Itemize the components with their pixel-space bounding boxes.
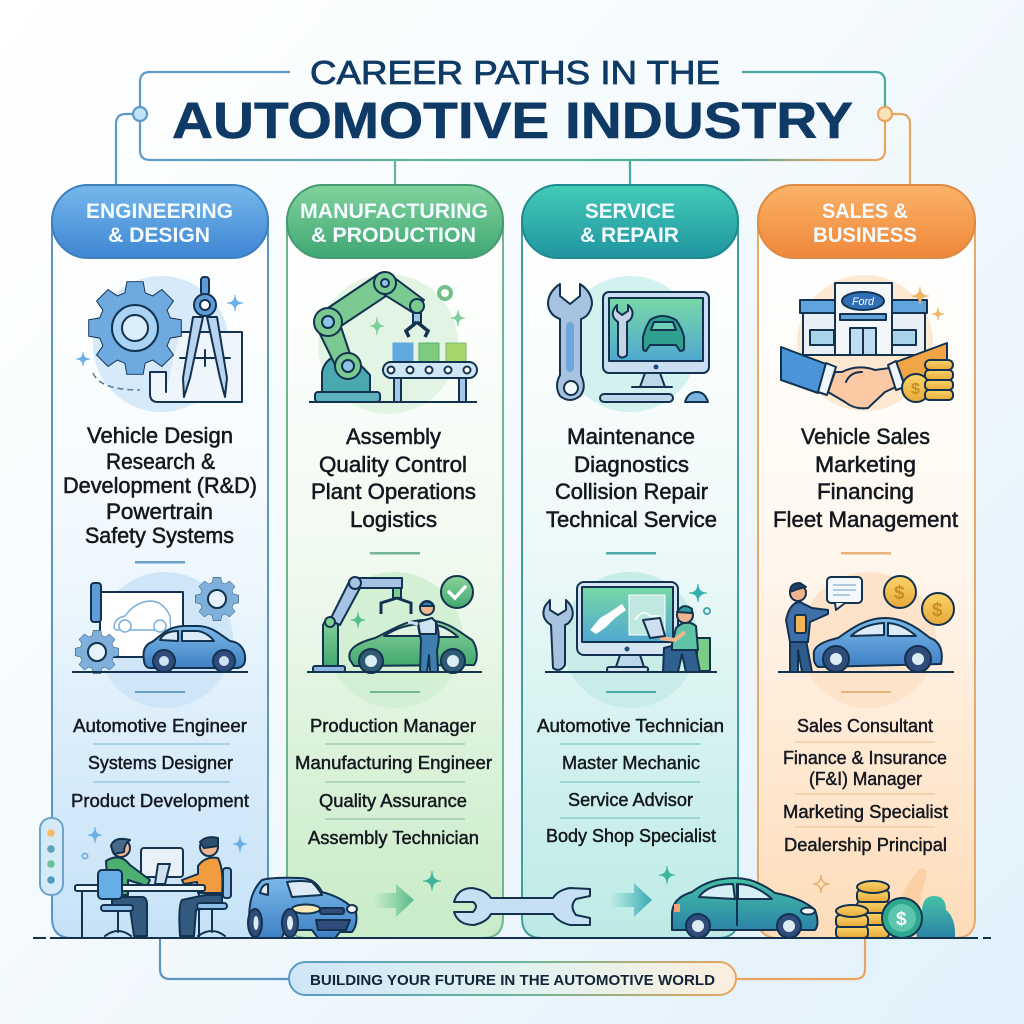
footer banner: BUILDING YOUR FUTURE IN THE AUTOMOTIVE WORLD (310, 972, 715, 989)
text block: job roles: Dealership Principal (784, 835, 947, 855)
footer connectors (160, 939, 865, 979)
text block: job roles: Finance & Insurance (783, 748, 947, 768)
text block: job roles: Automotive Engineer (73, 716, 247, 736)
icon: salesperson, car and coins (778, 572, 954, 708)
icon: salesperson, car and coins: $ (932, 600, 943, 621)
panel: sales and business (758, 185, 975, 938)
icon: car design screen with gears (72, 572, 248, 708)
text block: specialties: Vehicle Design (87, 423, 233, 448)
text block: specialties (773, 424, 958, 532)
text block: specialties: Development (R&D) (63, 473, 257, 498)
text block: job roles: Manufacturing Engineer (295, 753, 492, 773)
text block: job roles: Master Mechanic (562, 753, 700, 773)
text block: specialties: Fleet Management (773, 507, 958, 532)
text block: job roles: (F&I) Manager (809, 769, 922, 789)
heading: service and repair (522, 185, 738, 258)
heading: engineering and design: ENGINEERING (86, 200, 233, 223)
illustration: two people at desk (75, 827, 247, 938)
text block: job roles: Service Advisor (568, 790, 693, 810)
text block: specialties: Marketing (815, 452, 916, 477)
title frame and connectors (116, 72, 910, 186)
text block: job roles: Quality Assurance (319, 791, 467, 811)
text block: specialties: Assembly (346, 424, 441, 449)
icon: dealership and handshake: Ford (852, 296, 875, 308)
icon: robot arm and worker at car (307, 572, 482, 708)
text block: specialties (63, 423, 257, 548)
text block: specialties: Collision Repair (555, 479, 708, 504)
text block: job roles: Body Shop Specialist (546, 826, 716, 846)
text block: specialties: Maintenance (567, 424, 695, 449)
heading: engineering and design: & DESIGN (108, 224, 210, 247)
arrow: green (373, 884, 414, 917)
panel: engineering and design (52, 185, 268, 938)
text block: specialties: Plant Operations (311, 479, 476, 504)
text block: specialties: Technical Service (546, 507, 717, 532)
text block: specialties: Research & (106, 449, 215, 474)
text block: job roles: Production Manager (310, 716, 476, 736)
text block: specialties: Financing (817, 479, 914, 504)
text block: job roles: Systems Designer (88, 753, 233, 773)
text block: job roles: Assembly Technician (308, 828, 479, 848)
heading: manufacturing and production: MANUFACTURING (300, 200, 488, 223)
text block: specialties: Logistics (350, 507, 437, 532)
illustration: coin stacks and plant: $ (896, 909, 907, 930)
title (172, 54, 853, 149)
text block: job roles: Sales Consultant (797, 716, 933, 736)
icon: dealership and handshake (781, 275, 953, 411)
icon: gear and compass over blueprint (76, 276, 243, 412)
text block: job roles (537, 716, 724, 846)
heading: sales and business: BUSINESS (813, 224, 917, 247)
icon: salesperson, car and coins: $ (894, 583, 905, 604)
icon: wrench and diagnostic monitor (548, 276, 709, 412)
heading: sales and business (758, 185, 975, 258)
illustration: front-view blue car (248, 878, 357, 938)
text block: job roles (71, 716, 249, 811)
text block: job roles: Marketing Specialist (783, 802, 948, 822)
panel: service and repair (522, 185, 738, 938)
heading: service and repair: & REPAIR (580, 224, 679, 247)
ground line (33, 937, 991, 939)
illustration: coin stacks and plant (836, 868, 955, 938)
title: CAREER PATHS IN THE (310, 54, 720, 91)
text block: specialties: Powertrain (106, 499, 213, 524)
text block: specialties (546, 424, 717, 532)
text block: specialties: Diagnostics (574, 452, 689, 477)
icon: robot arm and conveyor (309, 272, 477, 414)
icon: orange sparkle (813, 875, 829, 893)
heading: sales and business: SALES & (822, 200, 908, 223)
icon: technician with laptop and monitor (543, 572, 717, 708)
illustration: teal sedan (672, 878, 818, 938)
title: AUTOMOTIVE INDUSTRY (172, 92, 853, 149)
text block: job roles (783, 716, 948, 855)
heading: service and repair: SERVICE (585, 200, 675, 223)
icon: sparkles (423, 866, 675, 891)
icon: dealership and handshake: $ (911, 381, 920, 398)
illustration: large wrench (454, 888, 590, 925)
arrow: teal (610, 883, 652, 917)
panel: manufacturing and production (287, 185, 503, 938)
text block: specialties: Quality Control (319, 452, 467, 477)
legend pill with dots (40, 818, 63, 895)
heading: engineering and design (52, 185, 268, 258)
text block: job roles: Product Development (71, 791, 249, 811)
text block: specialties (311, 424, 476, 532)
heading: manufacturing and production: & PRODUCTION (311, 224, 476, 247)
footer banner (289, 962, 736, 995)
text block: job roles (295, 716, 492, 848)
text block: specialties: Vehicle Sales (801, 424, 930, 449)
heading: manufacturing and production (287, 185, 503, 258)
text block: job roles: Automotive Technician (537, 716, 724, 736)
text block: specialties: Safety Systems (85, 523, 234, 548)
